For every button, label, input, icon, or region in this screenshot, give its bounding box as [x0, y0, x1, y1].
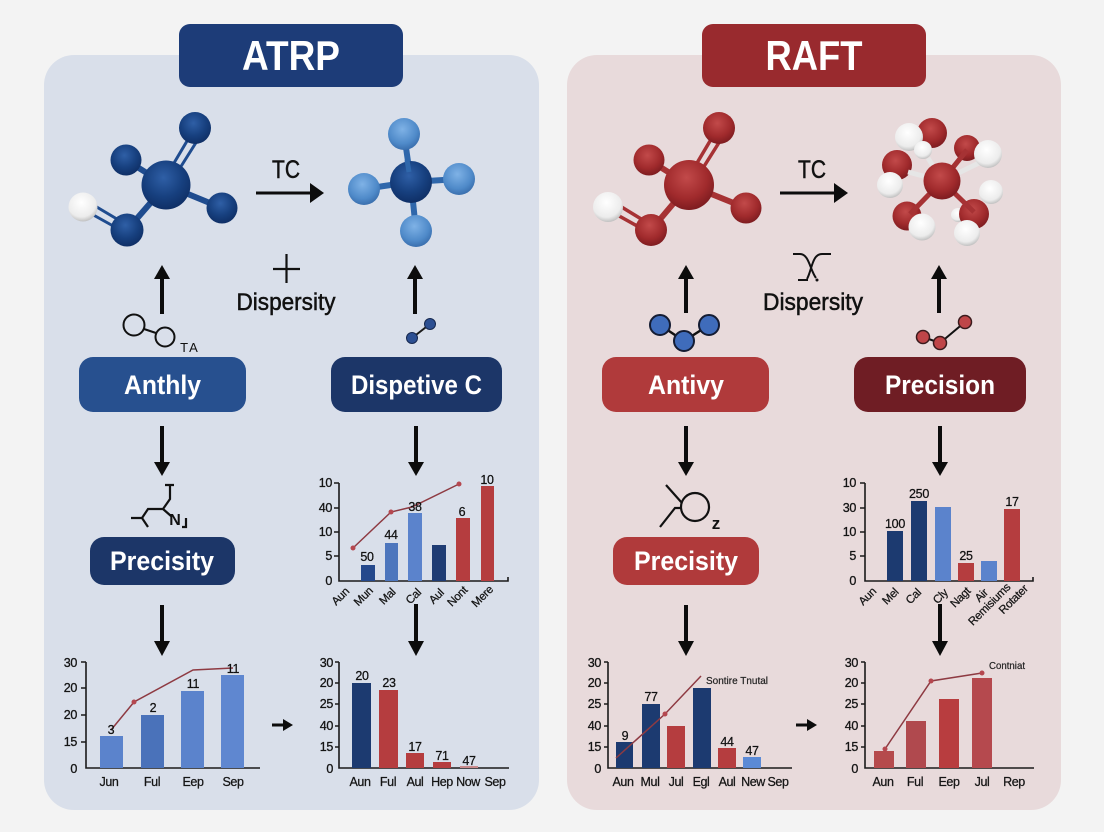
chart: ATRP lower left bars: 2	[150, 701, 157, 715]
chart: RAFT lower right bars: Aun	[872, 775, 894, 789]
chart: ATRP lower left bars: Sep	[222, 775, 244, 789]
panel: RAFT	[567, 24, 1061, 810]
chart: ATRP lower right bars: Ful	[380, 775, 396, 789]
heading: RAFT: RAFT	[766, 32, 863, 79]
chart: RAFT upper bars: 5	[849, 549, 856, 563]
arrow down lower left	[678, 605, 694, 656]
chart: RAFT upper bars: Air	[973, 587, 991, 605]
chart: ATRP lower left bars: 11	[187, 677, 200, 691]
icon: dispersity curve	[793, 254, 831, 282]
icon: ring Z	[660, 485, 720, 533]
chart: ATRP lower right bars: 40	[320, 719, 333, 733]
chart: RAFT lower left bars: Aun	[612, 775, 634, 789]
chart: RAFT lower right bars	[845, 656, 1034, 789]
chart: RAFT upper bars: 10	[843, 476, 856, 490]
chart: ATRP lower left bars: 0	[70, 762, 77, 776]
icon: ring chain TA	[124, 314, 200, 355]
chart: RAFT lower right bars: 25	[845, 697, 858, 711]
chart: ATRP upper bars: Mal	[377, 586, 398, 607]
chart: ATRP lower right bars: 0	[326, 762, 333, 776]
molecule: RAFT product	[877, 118, 1003, 246]
chart: ATRP upper bars: Aun	[330, 586, 352, 608]
chart: ATRP upper bars: 50	[360, 550, 374, 564]
chart: ATRP lower left bars: Eep	[182, 775, 204, 789]
chart: ATRP upper bars: Aul	[427, 587, 447, 607]
label: Dispersity: Dispersity	[236, 289, 336, 316]
chart: RAFT lower left bars: 9	[622, 729, 629, 743]
chart: RAFT lower right bars: Eep	[938, 775, 960, 789]
arrow down lower right	[408, 604, 424, 656]
chart: ATRP lower left bars: 15	[64, 735, 77, 749]
chart: RAFT lower right bars: Ful	[907, 775, 923, 789]
chart: ATRP upper bars	[319, 473, 508, 610]
chart: ATRP upper bars: Cal	[404, 587, 424, 607]
icon: small molecule	[406, 318, 436, 344]
chart: RAFT upper bars: Rotater	[997, 583, 1031, 617]
chart: RAFT lower right bars: Rep	[1003, 775, 1025, 789]
reaction arrow: TC: TC	[272, 156, 300, 184]
arrow down lower left	[154, 605, 170, 656]
chart: RAFT lower right bars: 15	[845, 740, 858, 754]
chart: RAFT upper bars: Cly	[931, 587, 951, 607]
chart: RAFT upper bars: Aun	[857, 586, 879, 608]
chart: ATRP lower right bars: 20	[320, 676, 333, 690]
chart: RAFT lower left bars: 0	[594, 762, 601, 776]
chart: ATRP upper bars: 10	[319, 476, 332, 490]
heading: RAFT	[702, 24, 926, 87]
chart: RAFT upper bars	[843, 476, 1033, 628]
chart: RAFT lower right bars: 20	[845, 676, 858, 690]
chart: RAFT lower left bars: Sontire Tnutal	[706, 675, 768, 687]
chart: ATRP upper bars: 10	[319, 525, 332, 539]
chart: RAFT upper bars: 0	[849, 574, 856, 588]
chart: ATRP lower left bars: 11	[227, 662, 240, 676]
button: Anthly	[79, 357, 246, 412]
chart: ATRP upper bars: 10	[480, 473, 494, 487]
chart: RAFT upper bars: 30	[843, 501, 856, 515]
arrow up left	[678, 265, 694, 313]
chart: RAFT upper bars: 10	[843, 525, 856, 539]
chart: RAFT lower left bars: Aul	[719, 775, 735, 789]
arrow down left	[678, 426, 694, 476]
button: Antivy	[602, 357, 769, 412]
chart: RAFT lower left bars: 15	[588, 740, 601, 754]
chart: ATRP lower left bars	[64, 656, 260, 789]
chart: RAFT lower left bars: Jul	[669, 775, 683, 789]
chart: ATRP lower left bars: 3	[108, 723, 115, 737]
button: Precisity: Precisity	[110, 546, 214, 576]
chart: RAFT upper bars: Cal	[904, 587, 924, 607]
molecule: ATRP reactant	[68, 112, 238, 246]
chart: RAFT lower left bars	[588, 656, 792, 789]
button: Dispetive C	[331, 357, 502, 412]
button: Anthly: Anthly	[124, 370, 201, 400]
chart: RAFT lower left bars: 20	[588, 676, 601, 690]
chart: RAFT lower left bars: Sep	[767, 775, 789, 789]
icon: blue chain	[650, 315, 719, 351]
button: Precisity	[613, 537, 759, 585]
chart: ATRP lower right bars: 17	[408, 740, 422, 754]
chart: ATRP lower right bars	[320, 656, 509, 789]
chart: ATRP upper bars: 40	[319, 501, 332, 515]
icon: red chain	[916, 316, 972, 350]
chart: RAFT lower left bars: 40	[588, 719, 601, 733]
chart: ATRP lower left bars: 20	[64, 681, 77, 695]
chart: ATRP lower right bars: 20	[355, 669, 369, 683]
button: Precisity	[90, 537, 235, 585]
chart: ATRP lower left bars: Jun	[100, 775, 119, 789]
reaction arrow: TC: TC	[798, 156, 826, 184]
chart: RAFT upper bars: 25	[959, 549, 973, 563]
chart: ATRP upper bars: 38	[408, 500, 422, 514]
icon: ring Z: z	[712, 514, 720, 533]
heading: ATRP: ATRP	[242, 32, 340, 79]
arrow up right	[407, 265, 423, 314]
molecule: ATRP product	[348, 118, 475, 247]
icon: N structure: N	[169, 512, 181, 529]
chart: ATRP upper bars: 0	[325, 574, 332, 588]
chart: ATRP lower right bars: 23	[382, 676, 396, 690]
chart: ATRP lower left bars: 30	[64, 656, 77, 670]
chart: ATRP upper bars: 6	[459, 505, 466, 519]
panel: ATRP	[44, 24, 539, 810]
chart: ATRP lower right bars: Aul	[407, 775, 423, 789]
button: Dispetive C: Dispetive C	[351, 370, 482, 400]
chart: RAFT lower right bars: 0	[851, 762, 858, 776]
plus symbol	[273, 254, 300, 283]
arrow down right	[408, 426, 424, 476]
chart: ATRP lower right bars: 25	[320, 697, 333, 711]
chart: ATRP lower right bars: Aun	[349, 775, 371, 789]
chart: ATRP lower right bars: 15	[320, 740, 333, 754]
arrow up left	[154, 265, 170, 314]
chart: RAFT lower left bars: New	[741, 775, 766, 789]
arrow between ATRP charts	[272, 719, 293, 731]
label: Dispersity: Dispersity	[763, 289, 863, 316]
reaction arrow: TC	[256, 156, 324, 203]
chart: ATRP upper bars: Mun	[352, 585, 376, 609]
chart: RAFT upper bars: Mel	[880, 586, 901, 607]
chart: RAFT lower right bars: 40	[845, 719, 858, 733]
chart: RAFT lower left bars: 25	[588, 697, 601, 711]
arrow down right	[932, 426, 948, 476]
arrow up right	[931, 265, 947, 313]
chart: RAFT lower left bars: 47	[745, 744, 759, 758]
reaction arrow: TC	[780, 156, 848, 203]
chart: RAFT lower right bars: 30	[845, 656, 858, 670]
button: Precision: Precision	[885, 370, 995, 400]
chart: ATRP upper bars: 5	[325, 549, 332, 563]
chart: ATRP lower left bars: Ful	[144, 775, 160, 789]
chart: ATRP upper bars: Mere	[470, 584, 496, 610]
button: Precisity: Precisity	[634, 546, 738, 576]
chart: ATRP lower right bars: Hep	[431, 775, 453, 789]
heading: ATRP	[179, 24, 403, 87]
chart: ATRP upper bars: 44	[384, 528, 398, 542]
chart: ATRP lower right bars: 47	[462, 754, 476, 768]
arrow down left	[154, 426, 170, 476]
chart: RAFT upper bars: 250	[909, 487, 929, 501]
chart: ATRP lower right bars: Sep	[484, 775, 506, 789]
button: Antivy: Antivy	[648, 370, 724, 400]
chart: ATRP upper bars: Nont	[445, 584, 471, 609]
chart: RAFT lower left bars: 30	[588, 656, 601, 670]
chart: RAFT lower left bars: Egl	[693, 775, 709, 789]
arrow down lower right	[932, 604, 948, 656]
chart: RAFT upper bars: 100	[885, 517, 905, 531]
arrow between RAFT charts	[796, 719, 817, 731]
chart: ATRP lower right bars: Now	[456, 775, 481, 789]
chart: RAFT upper bars: 17	[1005, 495, 1019, 509]
chart: RAFT lower left bars: 77	[644, 690, 658, 704]
chart: RAFT upper bars: Nagt	[948, 585, 974, 610]
molecule: RAFT reactant	[593, 112, 762, 246]
chart: ATRP lower right bars: 71	[435, 749, 449, 763]
chart: RAFT lower right bars: Contniat	[989, 660, 1025, 672]
button: Precision	[854, 357, 1026, 412]
chart: RAFT lower left bars: Mul	[641, 775, 659, 789]
chart: RAFT lower right bars: Jul	[975, 775, 989, 789]
chart: RAFT lower left bars: 44	[720, 735, 734, 749]
icon: ring chain TA: TA	[180, 340, 200, 355]
chart: RAFT upper bars: Remisiums	[966, 581, 1014, 628]
chart: ATRP lower left bars: 20	[64, 708, 77, 722]
chart: ATRP lower right bars: 30	[320, 656, 333, 670]
icon: N structure	[131, 485, 186, 529]
